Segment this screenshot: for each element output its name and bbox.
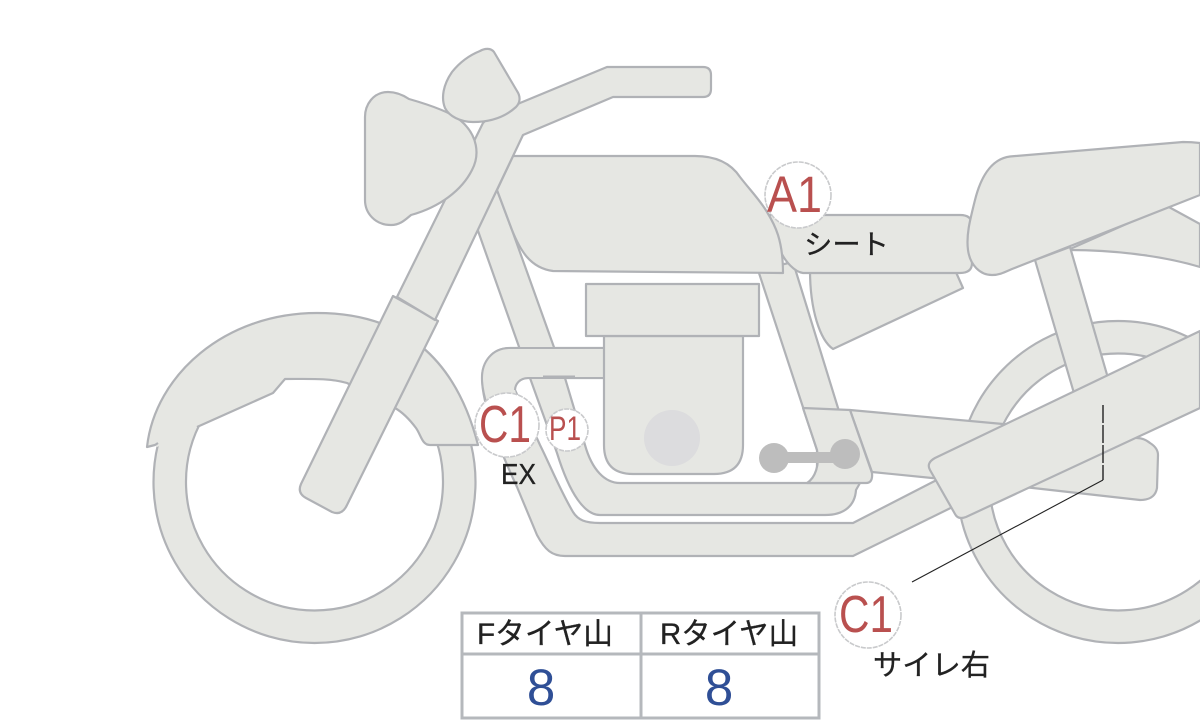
fuel tank	[497, 156, 783, 273]
badge: C1 exhaust: C1	[479, 396, 531, 454]
frame bracket	[803, 408, 872, 483]
foot peg	[759, 439, 860, 473]
swingarm	[850, 410, 1158, 500]
rear shock	[1035, 247, 1110, 400]
pipe joint fill over frame	[482, 348, 603, 440]
label: seat: シート	[804, 229, 889, 260]
engine block	[604, 336, 743, 474]
badge: C1 silencer: C1	[839, 586, 893, 644]
rear frame tube	[758, 262, 850, 470]
front tire value: 8	[527, 659, 555, 716]
front fork lower	[300, 296, 438, 513]
tail rail	[1070, 206, 1200, 267]
front tire header: Fタイヤ山	[477, 618, 613, 651]
side cover	[810, 270, 963, 349]
engine head	[586, 284, 759, 336]
label: silencer right: サイレ右	[873, 649, 990, 682]
lower exhaust pipe	[482, 348, 975, 556]
badge: P1: P1	[549, 410, 581, 448]
front tire	[154, 321, 476, 643]
meter	[443, 49, 520, 122]
rear wheel	[957, 321, 1200, 643]
label: EX: EX	[501, 459, 536, 491]
pipe joint outline	[482, 348, 603, 440]
badge: A1 seat: A1	[767, 166, 822, 223]
seat	[765, 215, 972, 273]
fork upper and handlebar	[397, 67, 711, 320]
leader line	[912, 405, 1103, 582]
rear tire value: 8	[705, 659, 733, 716]
muffler	[929, 331, 1200, 518]
rear tire header: Rタイヤ山	[660, 618, 798, 651]
headlight	[365, 92, 476, 225]
frame down tube and loop	[477, 190, 860, 515]
front fender	[147, 313, 478, 447]
engine case circle	[644, 410, 700, 466]
tail seat	[967, 142, 1200, 275]
tire tread table	[462, 613, 819, 718]
